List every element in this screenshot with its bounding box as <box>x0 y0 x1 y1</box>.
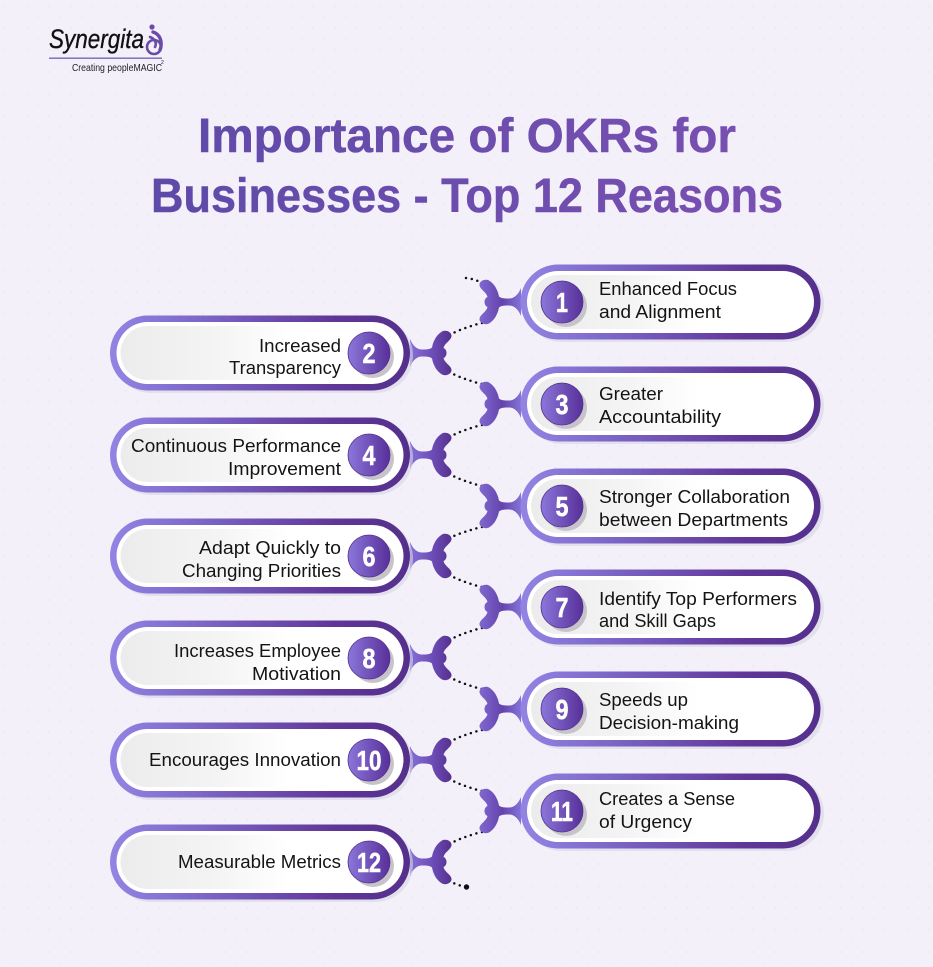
dotted connector line <box>449 278 482 887</box>
item 7: Identify Top Performers and Skill Gaps: and Skill Gaps <box>599 610 716 631</box>
item 10: Encourages Innovation <box>110 722 452 800</box>
item 6: Adapt Quickly to Changing Priorities: 6 <box>362 541 376 572</box>
item 5: Stronger Collaboration between Departments: between Departments <box>599 509 788 530</box>
item 5: Stronger Collaboration between Departments <box>479 468 824 546</box>
item 5: Stronger Collaboration between Departments: Stronger Collaboration <box>599 486 790 507</box>
item 7: Identify Top Performers and Skill Gaps <box>479 570 824 647</box>
item 8: Increases Employee Motivation: Increases Employee <box>174 640 341 661</box>
title <box>151 110 783 223</box>
item 6: Adapt Quickly to Changing Priorities: Adapt Quickly to <box>199 537 341 558</box>
item 8: Increases Employee Motivation: Motivation <box>252 663 341 684</box>
logo: Synergita: Synergita <box>49 24 144 54</box>
item 4: Continuous Performance Improvement: Improvement <box>228 458 341 479</box>
item 1: Enhanced Focus and Alignment <box>479 264 824 342</box>
logo: Synergita: 2 <box>161 60 164 66</box>
title: Businesses - Top 12 Reasons <box>151 170 783 223</box>
item 6: Adapt Quickly to Changing Priorities: Changing Priorities <box>182 560 341 581</box>
item 12: Measurable Metrics <box>110 824 452 902</box>
item 2: Increased Transparency <box>110 316 452 393</box>
item 4: Continuous Performance Improvement: Continuous Performance <box>131 435 341 456</box>
item 2: Increased Transparency: Transparency <box>229 357 342 378</box>
item 12: Measurable Metrics: Measurable Metrics <box>178 851 341 872</box>
item 8: Increases Employee Motivation: 8 <box>362 643 376 674</box>
item 9: Speeds up Decision-making: Decision-making <box>599 712 739 733</box>
item 3: Greater Accountability: Accountability <box>599 406 722 427</box>
item 11: Creates a Sense of Urgency: Creates a Sense <box>599 788 735 809</box>
item 10: Encourages Innovation: Encourages Innovation <box>149 749 341 770</box>
item 7: Identify Top Performers and Skill Gaps: 7 <box>556 592 568 623</box>
item 10: Encourages Innovation: 10 <box>356 745 382 776</box>
item 5: Stronger Collaboration between Departments: 5 <box>556 491 568 522</box>
item 1: Enhanced Focus and Alignment: Enhanced Focus <box>599 278 737 299</box>
item 2: Increased Transparency: Increased <box>259 335 341 356</box>
item 4: Continuous Performance Improvement: 4 <box>362 440 376 471</box>
item 1: Enhanced Focus and Alignment: and Alignment <box>599 301 721 322</box>
item 1: Enhanced Focus and Alignment: 1 <box>556 287 568 318</box>
item 3: Greater Accountability <box>479 366 824 444</box>
item 3: Greater Accountability: 3 <box>556 389 568 420</box>
item 11: Creates a Sense of Urgency: of Urgency <box>599 811 693 832</box>
end dot <box>464 884 469 890</box>
item 2: Increased Transparency: 2 <box>362 338 376 369</box>
item 11: Creates a Sense of Urgency <box>479 774 824 851</box>
item 8: Increases Employee Motivation <box>110 620 452 698</box>
title: Importance of OKRs for <box>198 110 736 163</box>
item 7: Identify Top Performers and Skill Gaps: Identify Top Performers <box>599 588 797 609</box>
item 9: Speeds up Decision-making: Speeds up <box>599 689 688 710</box>
logo: Synergita <box>49 24 164 74</box>
item 4: Continuous Performance Improvement <box>110 418 452 495</box>
icon: Synergita swirl <box>147 24 161 54</box>
item 3: Greater Accountability: Greater <box>599 383 663 404</box>
logo: Synergita: Creating peopleMAGIC <box>72 62 162 74</box>
item 11: Creates a Sense of Urgency: 11 <box>551 796 573 827</box>
item 6: Adapt Quickly to Changing Priorities <box>110 518 452 596</box>
item 12: Measurable Metrics: 12 <box>357 847 381 878</box>
item 9: Speeds up Decision-making: 9 <box>556 694 568 725</box>
item 9: Speeds up Decision-making <box>479 672 824 749</box>
